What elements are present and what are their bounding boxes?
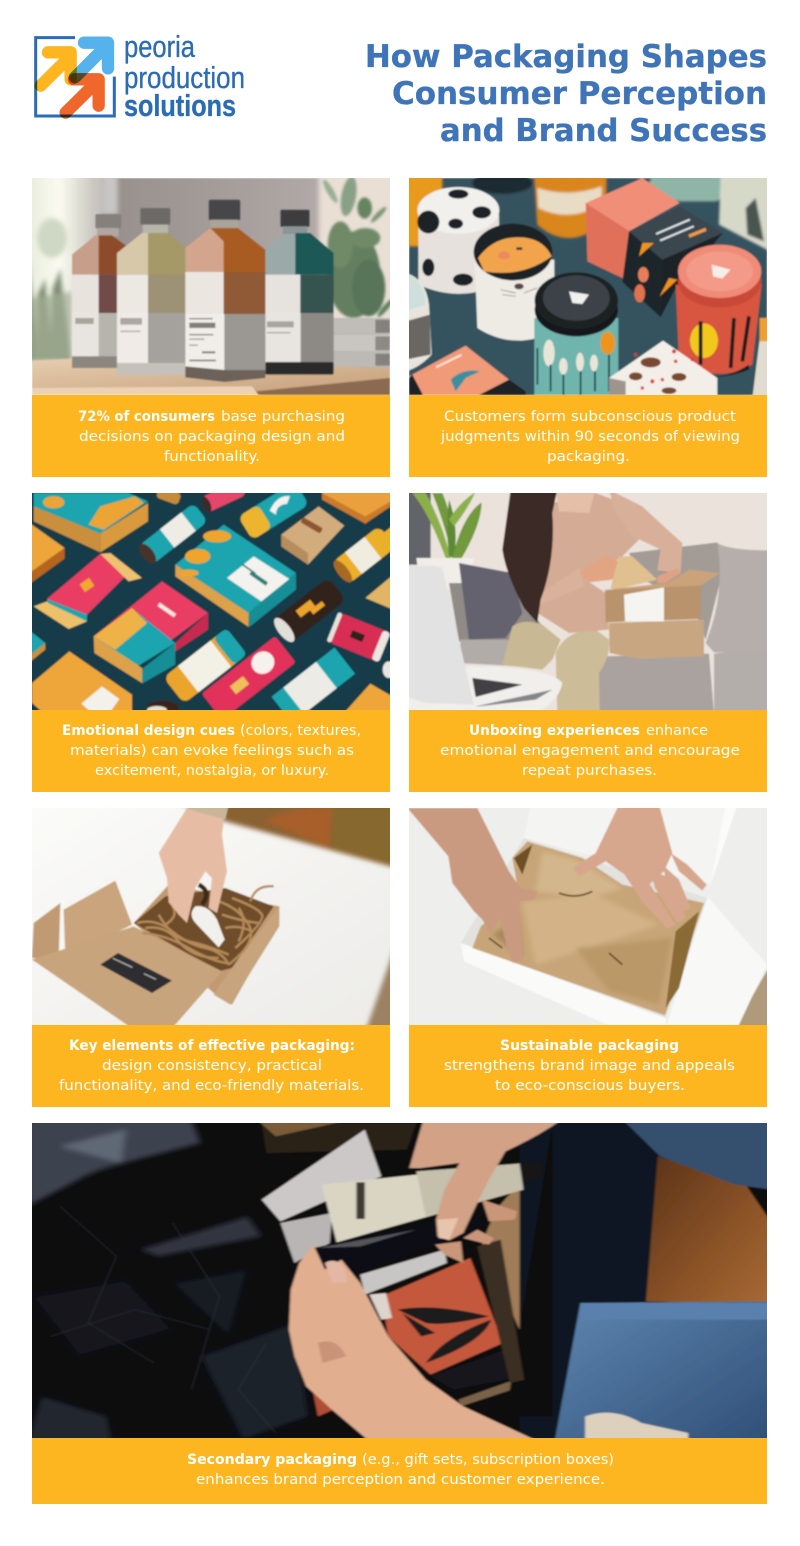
panel: 90 seconds [406,172,770,477]
caption text: materials) can evoke feelings such as [70,743,354,759]
laptop and table [406,565,562,713]
red pouch [34,553,142,629]
caption text [59,1038,364,1094]
photo: illustrated jars and boxes [406,172,770,398]
box [32,881,279,1028]
card [381,1258,503,1375]
caption text: enhance [646,723,708,739]
red tube [202,636,296,710]
caption text: Sustainable packaging [500,1038,679,1054]
hair [502,490,557,623]
caption band [32,1025,390,1107]
white dotted box [609,341,717,395]
red jar [676,245,762,377]
caption text: enhances brand perception and customer experience. [196,1472,605,1488]
left white jar [406,273,432,371]
caption band [409,395,767,477]
photo: hands pressing kraft paper into a white box [406,805,770,1028]
big teal box [175,525,296,627]
caption band [32,395,390,477]
caption text: design consistency, practical [102,1058,322,1074]
photo: hand placing a bottle in a kraft box [29,801,397,1032]
caption text: base purchasing [221,409,345,425]
box interior [262,1123,416,1153]
dark clothing and legs [520,1120,660,1441]
tissue [27,1120,309,1441]
title: and Brand Success [440,113,767,149]
top cylinders [138,504,206,564]
caption text: excitement, nostalgia, or luxury. [95,763,329,779]
photo: hands unpacking cosmetics from black tissue [27,1120,772,1441]
dark cylinder [272,580,344,644]
shredded paper [137,885,274,965]
caption text [440,409,740,465]
sofa [449,542,770,713]
panel: key elements [29,801,397,1107]
hand [159,808,227,923]
cosmetics behind [262,1130,381,1221]
bottle 2 [117,208,185,375]
top left teal box [34,493,148,552]
hands [579,555,622,582]
title: Consumer Perception [392,76,767,112]
black tube [313,1212,483,1286]
teal jar with black lid [534,272,618,395]
caption text: repeat purchases. [522,763,657,779]
caption band [409,1025,767,1107]
bottom hand [289,1245,538,1441]
panel: unboxing experiences [406,490,770,792]
kraft box [281,506,344,565]
sweater [537,490,682,633]
caption text: to eco-conscious buyers. [495,1078,685,1094]
red tub [327,612,391,662]
logo wordmark: peoria [124,29,196,64]
bottle 3 [185,200,265,382]
caption text: Unboxing experiences [469,723,640,739]
panel: secondary packaging [27,1120,772,1504]
caption text: functionality. [164,449,260,465]
caption text: (colors, textures, [240,723,361,739]
caption text: 72% of consumers [78,409,215,425]
bottle 4 [265,210,334,375]
caption text: Secondary packaging [187,1452,357,1468]
top hand [409,1120,562,1240]
caption text: Customers form subconscious product [444,409,737,425]
yellow bottle [163,628,247,704]
panel: 72% of consumers [25,171,397,477]
photo: four bottles on a wooden table [25,171,397,395]
caption text [62,723,361,779]
caption text: judgments within 90 seconds of viewing [440,429,740,445]
caption text [187,1452,614,1488]
bottle [192,906,225,947]
parcel [601,556,720,659]
title [365,39,767,149]
teal carton [270,646,356,710]
cat jar [474,224,554,341]
caption text: strengthens brand image and appeals [444,1058,735,1074]
bottle 1 [72,214,127,368]
caption text: packaging. [547,449,630,465]
red teal box [94,581,208,684]
caption text: Key elements of effective packaging: [69,1038,355,1054]
peach box [409,346,526,395]
panel: sustainable packaging [406,805,770,1107]
icon: square frame with three arrows [36,38,114,116]
caption text [78,409,345,465]
caption text: Emotional design cues [62,723,235,739]
right hand [573,805,707,929]
cushion [459,563,522,640]
caption text [444,1038,735,1094]
photo: woman unboxing a parcel on a sofa [406,490,770,713]
caption band [32,710,390,792]
title: How Packaging Shapes [365,39,767,75]
cream tube [322,1161,543,1242]
logo wordmark: production [124,60,245,95]
amber bottle [332,526,390,584]
caption band [409,710,767,792]
amber carton [32,651,132,713]
caption text: decisions on packaging design and [79,429,345,445]
left hand [407,808,537,963]
caption text [440,723,740,779]
photo: flat lay of colourful boxes [32,493,390,710]
logo: Peoria Production Solutions [36,29,245,123]
panel: emotional design cues [29,480,402,792]
lower fingers of top hand [435,1200,517,1263]
caption text: (e.g., gift sets, subscription boxes) [362,1452,614,1468]
white sachet [360,1250,447,1295]
caption band [32,1438,767,1504]
legs [502,622,609,713]
cow jar [417,187,499,294]
box coral [586,178,723,317]
logo wordmark [124,29,245,123]
caption text: emotional engagement and encourage [440,743,740,759]
logo wordmark: solutions [124,88,236,123]
caption text: functionality, and eco-friendly materials. [59,1078,364,1094]
kraft paper [472,841,704,1015]
